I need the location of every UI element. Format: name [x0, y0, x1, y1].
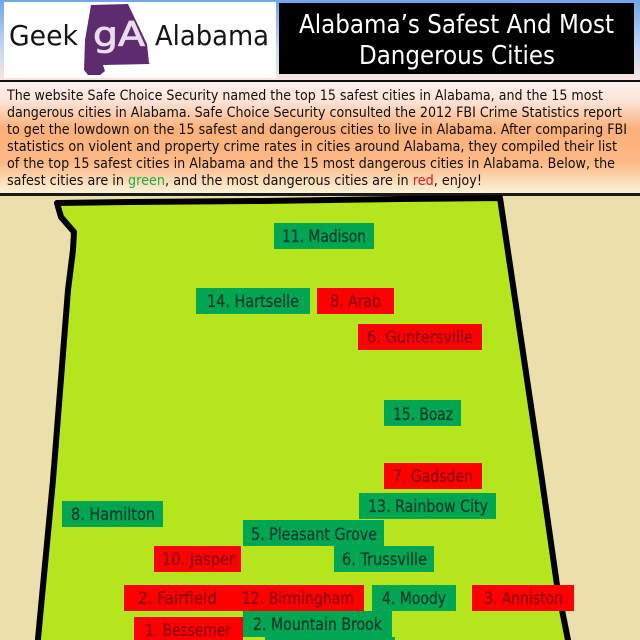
logo: Geek gA Alabama: Geek — [9, 19, 79, 52]
city: 10. Jasper: 10. Jasper — [162, 550, 235, 569]
icon: purple Alabama state with gA: gA — [93, 15, 145, 55]
city: 2. Fairfield and 12. Birmingham: 2. Fairfield — [138, 589, 217, 608]
panel: intro text: safest cities are in green, and the most dangerous cities are in red, enjoy! — [7, 173, 482, 189]
city: 8. Arab: 8. Arab — [330, 292, 381, 311]
divider — [0, 193, 640, 196]
city: 2. Mountain Brook — [243, 611, 395, 640]
city: 4. Moody: 4. Moody — [382, 589, 446, 608]
icon: purple Alabama state with gA — [84, 4, 150, 75]
city: 8. Hamilton: 8. Hamilton — [71, 505, 155, 524]
header band — [0, 0, 640, 80]
city: 11. Madison: 11. Madison — [282, 227, 366, 246]
city: 13. Rainbow City: 13. Rainbow City — [368, 497, 488, 516]
city: 5. Pleasant Grove: 5. Pleasant Grove — [251, 525, 377, 544]
city: 6. Trussville: 6. Trussville — [342, 550, 427, 569]
city: 15. Boaz: 15. Boaz — [393, 405, 453, 424]
city: 6. Trussville — [334, 546, 434, 572]
city: 7. Gadsden — [384, 463, 482, 489]
title — [279, 3, 634, 74]
city: 11. Madison — [274, 223, 374, 249]
city: 14. Hartselle: 14. Hartselle — [207, 292, 299, 311]
city: 8. Hamilton — [62, 501, 163, 527]
logo: Geek gA Alabama — [4, 2, 276, 78]
city: 3. Anniston: 3. Anniston — [484, 589, 563, 608]
city: 1. Bessemer: 1. Bessemer — [145, 621, 231, 640]
map: Alabama outline — [36, 198, 572, 640]
logo: Geek gA Alabama: Alabama — [155, 19, 269, 52]
panel: intro text — [0, 82, 640, 193]
city: 15. Boaz — [384, 400, 461, 426]
city: 8. Arab — [317, 288, 394, 314]
divider — [0, 80, 640, 82]
city: 13. Rainbow City — [359, 493, 496, 519]
city: 4. Moody — [372, 585, 456, 611]
city: 2. Fairfield and 12. Birmingham — [124, 585, 364, 611]
city: 10. Jasper — [154, 546, 241, 572]
city: 3. Anniston — [472, 585, 574, 611]
city: 7. Gadsden: 7. Gadsden — [393, 467, 473, 486]
city: 6. Guntersville: 6. Guntersville — [367, 328, 473, 347]
city: 5. Pleasant Grove — [243, 520, 384, 546]
title: Dangerous Cities — [359, 41, 555, 71]
city: 2. Mountain Brook: 2. Mountain Brook — [253, 615, 382, 634]
city: 6. Guntersville — [358, 324, 482, 350]
city: 2. Fairfield and 12. Birmingham: 12. Birmingham — [242, 589, 354, 608]
city: 14. Hartselle — [196, 288, 310, 314]
